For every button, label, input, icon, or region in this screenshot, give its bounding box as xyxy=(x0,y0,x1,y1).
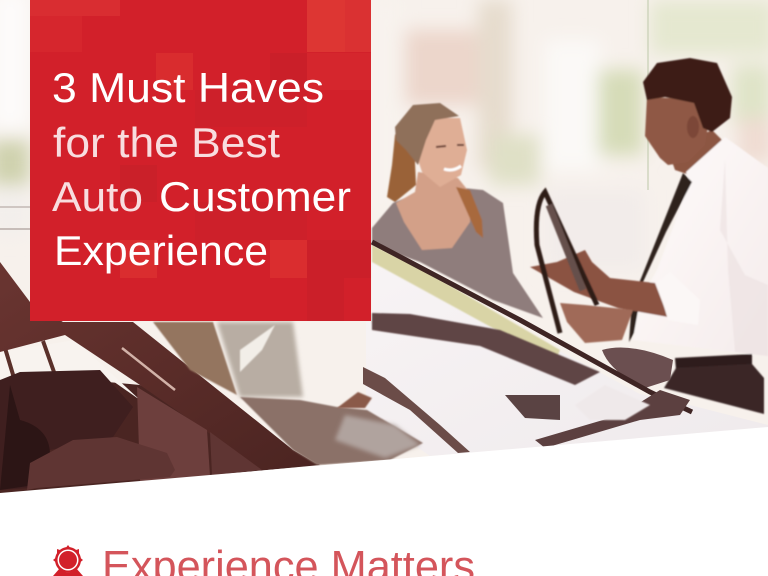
woman's long hair strand xyxy=(456,187,483,238)
glass xyxy=(366,250,768,456)
pillar reflection xyxy=(153,322,237,395)
lower body base xyxy=(0,372,320,495)
panel: red title box xyxy=(30,0,371,321)
man's upper forearm xyxy=(530,250,668,317)
woman's neck and chest xyxy=(396,172,470,250)
rear window xyxy=(0,340,140,400)
mosaic background xyxy=(30,0,371,321)
woman's ponytail xyxy=(387,118,416,202)
wiper and cowl xyxy=(363,367,470,453)
icon: award rosette xyxy=(53,545,83,576)
woman's eyes and smile xyxy=(436,145,464,147)
woman xyxy=(372,103,543,318)
reflection: green band xyxy=(372,245,560,362)
man xyxy=(530,58,768,414)
foreground mirror xyxy=(27,437,175,490)
pillar highlight xyxy=(122,348,175,390)
car in foreground, left xyxy=(0,262,423,495)
reflection: dark pillar band xyxy=(372,313,600,385)
side mirror xyxy=(602,348,673,388)
white slanted section xyxy=(0,427,768,576)
windshield xyxy=(363,242,768,456)
hood xyxy=(240,397,423,465)
title text: for the Best xyxy=(53,119,280,166)
man's ear xyxy=(687,116,699,138)
window pillars xyxy=(5,341,54,378)
shirt sleeve cuff xyxy=(657,272,700,325)
man's shirt xyxy=(633,137,768,356)
side glass reflection xyxy=(217,322,303,397)
woman's face xyxy=(414,118,467,187)
man's face xyxy=(645,97,712,165)
car door frame xyxy=(536,192,597,333)
woman's torso xyxy=(372,187,543,318)
man's tie xyxy=(629,173,692,342)
title text: 3 Must Haves xyxy=(52,64,324,111)
man's neck xyxy=(668,130,722,175)
man's hair xyxy=(643,58,732,132)
door panel xyxy=(137,387,210,481)
roof edge xyxy=(372,242,692,412)
shirt shadow xyxy=(720,160,768,356)
woman's hair xyxy=(395,103,459,165)
hand reflection xyxy=(337,392,372,408)
man's trousers xyxy=(664,364,764,414)
section heading: Experience Matters xyxy=(53,542,475,576)
man's belt xyxy=(675,354,752,370)
title text: Auto xyxy=(52,173,143,220)
man's lower hand xyxy=(560,303,633,343)
title text: Experience xyxy=(54,227,268,274)
title text xyxy=(52,64,351,274)
title text: Customer xyxy=(159,173,351,220)
A-pillar and roof xyxy=(0,262,317,470)
seat xyxy=(0,370,133,490)
